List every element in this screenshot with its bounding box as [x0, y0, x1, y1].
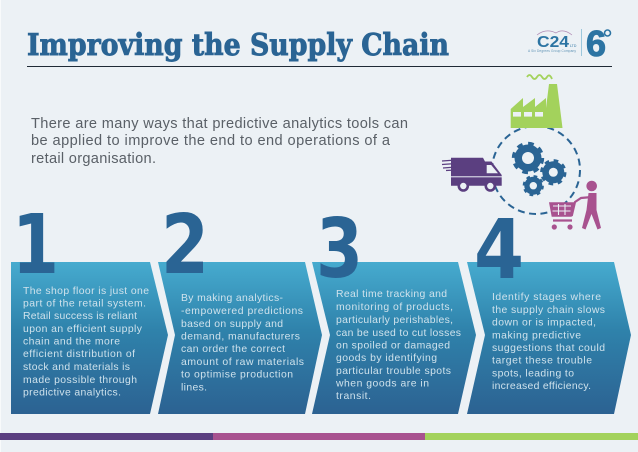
- intro text: [31, 116, 408, 167]
- panel 4 text: spots, leading to: [492, 368, 574, 380]
- title: Improving the Supply Chain: [27, 28, 449, 63]
- panel 4 text: [492, 292, 605, 392]
- panel 1 text: Retail success is reliant: [23, 311, 137, 322]
- panel 3 text: on spoiled or damaged: [336, 340, 450, 352]
- panel 1 text: predictive analytics.: [23, 388, 121, 398]
- panel 2 text: lines.: [181, 382, 207, 394]
- panel 3 text: monitoring of products,: [336, 302, 453, 313]
- logo: C24 and 6 degrees: C24: [537, 34, 569, 51]
- panel 4: [467, 203, 631, 414]
- panel 3 text: goods by identifying: [336, 353, 437, 364]
- panel 1 text: The shop floor is just one: [23, 286, 149, 297]
- panel 2 text: can order the correct: [181, 344, 285, 355]
- panel 3 text: particular trouble spots: [336, 366, 451, 377]
- number 1: 1: [12, 198, 59, 293]
- logo: C24 and 6 degrees: 6: [586, 23, 606, 64]
- panel 2 text: amount of raw materials: [181, 357, 304, 368]
- logo: C24 and 6 degrees: A Six Degrees Group Company: [528, 49, 576, 53]
- panel 1 text: stock and materials is: [23, 362, 130, 373]
- panel 4 text: increased efficiency.: [492, 381, 591, 392]
- panel 1 text: upon an efficient supply: [23, 324, 143, 335]
- icon: gears: [514, 144, 565, 195]
- panel 4 text: making predictive: [492, 330, 581, 342]
- intro text: be applied to improve the end to end operations of a: [31, 133, 391, 149]
- panel 4 text: suggestions that could: [492, 343, 605, 354]
- panel 2 text: based on supply and: [181, 319, 283, 330]
- panel 4 text: the supply chain slows: [492, 305, 605, 316]
- number 4: 4: [474, 203, 524, 298]
- logo: C24 and 6 degrees: [528, 23, 610, 64]
- icon: delivery van: [442, 158, 502, 190]
- icon: factory: [511, 75, 562, 128]
- footer colour bar: [0, 433, 638, 440]
- panel 2 text: demand, manufacturers: [181, 332, 300, 342]
- panel 4 text: target these trouble: [492, 356, 592, 366]
- panel 3 text: can be used to cut losses: [336, 328, 461, 339]
- panel 4 text: down or is impacted,: [492, 318, 596, 328]
- panel 1 text: efficient distribution of: [23, 349, 135, 360]
- supply chain illustration: [442, 75, 601, 230]
- panel 2 text: [181, 293, 304, 394]
- intro text: There are many ways that predictive analytics tools can: [31, 116, 408, 132]
- panel 3 text: particularly perishables,: [336, 315, 453, 326]
- panel 1: [11, 198, 168, 414]
- panel 2: [158, 198, 322, 414]
- intro text: retail organisation.: [31, 151, 156, 167]
- panel 1 text: [23, 286, 149, 398]
- panel 4 text: Identify stages where: [492, 292, 601, 303]
- panel 3 text: transit.: [336, 391, 371, 402]
- panel 1 text: chain and the more: [23, 336, 120, 348]
- number 2: 2: [161, 198, 209, 293]
- logo: C24 and 6 degrees: LTD: [570, 44, 577, 48]
- panel 3 text: [335, 289, 461, 402]
- panel 1 text: made possible through: [23, 375, 137, 386]
- panel 3 text: Real time tracking and: [336, 289, 447, 300]
- panel 2 text: to optimise production: [181, 370, 293, 380]
- panel 3: [312, 202, 476, 414]
- panel 1 text: part of the retail system.: [23, 298, 146, 310]
- panel 2 text: By making analytics-: [181, 293, 283, 304]
- panel 3 text: when goods are in: [335, 378, 429, 390]
- number 3: 3: [316, 202, 363, 297]
- icon: shopper with cart: [549, 181, 601, 230]
- panel 2 text: -empowered predictions: [181, 306, 303, 317]
